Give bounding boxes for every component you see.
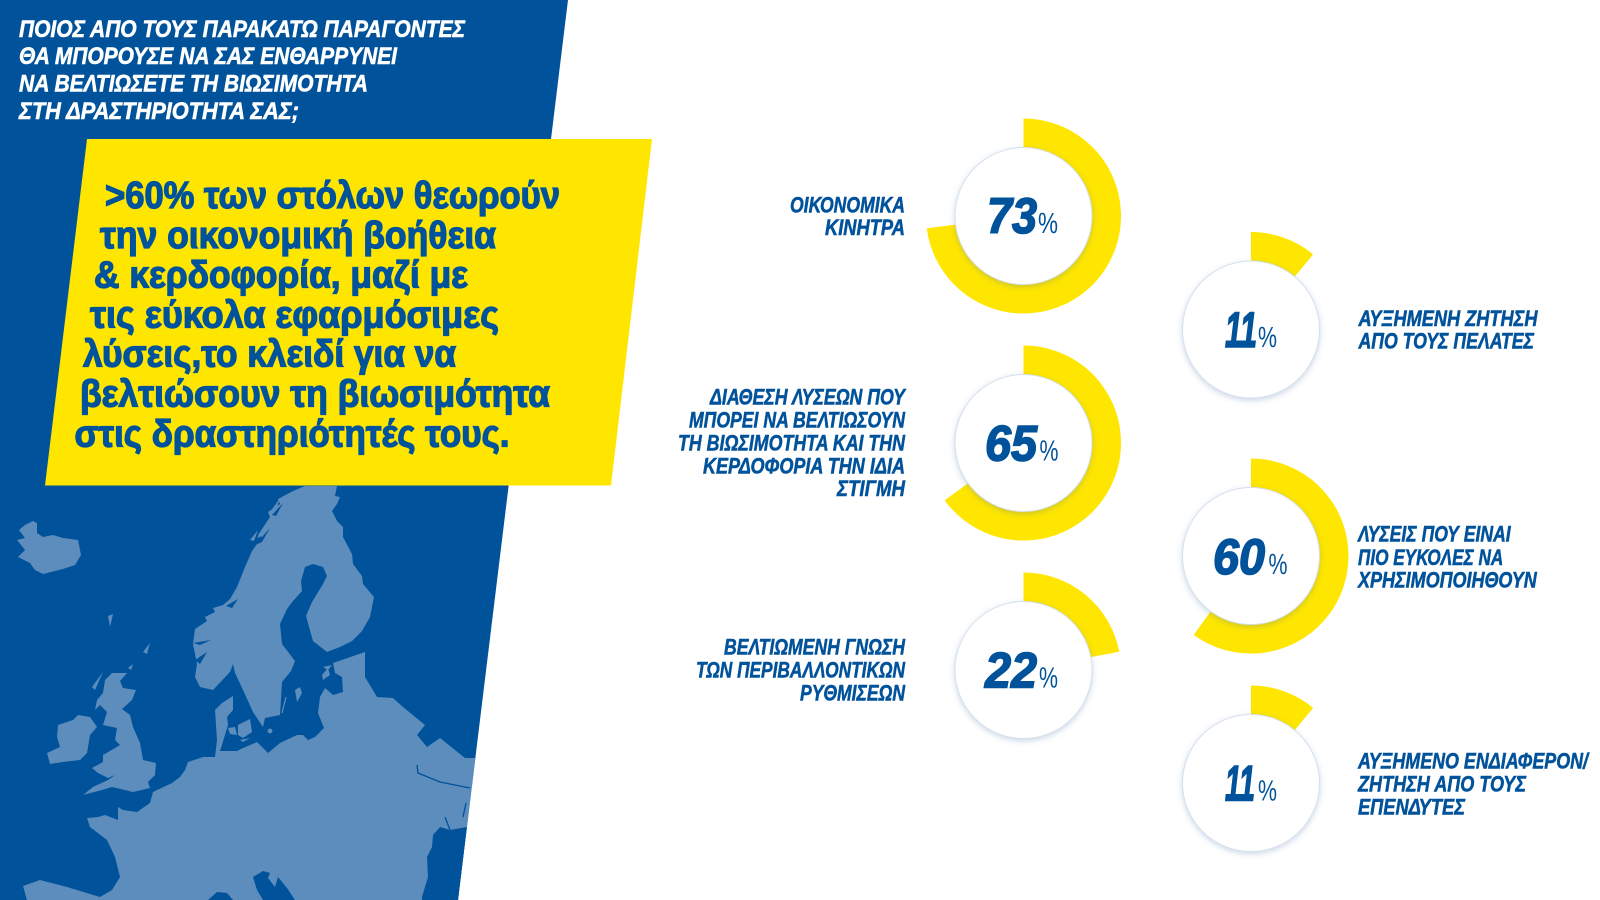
label: ΒΕΛΤΙΩΜΕΝΗ ΓΝΩΣΗ (724, 634, 906, 659)
callout text (74, 175, 560, 456)
label: ΖΗΤΗΣΗ ΑΠΟ ΤΟΥΣ (1357, 772, 1527, 796)
callout text: την οικονομική βοήθεια (100, 215, 496, 257)
value 73%: % (1038, 208, 1058, 240)
label (1357, 748, 1590, 819)
label (1356, 522, 1538, 592)
item: 11% customer demand (1182, 246, 1538, 398)
callout text: >60% των στόλων θεωρούν (105, 175, 560, 217)
callout text: λύσεις,το κλειδί για να (83, 334, 456, 376)
callout text: στις δραστηριότητές τους. (74, 414, 510, 456)
heading: ΣΤΗ ΔΡΑΣΤΗΡΙΟΤΗΤΑ ΣΑΣ; (18, 98, 299, 125)
label: ΚΙΝΗΤΡΑ (825, 215, 905, 240)
heading: ΝΑ ΒΕΛΤΙΩΣΕΤΕ ΤΗ ΒΙΩΣΙΜΟΤΗΤΑ (19, 70, 368, 98)
callout text: τις εύκολα εφαρμόσιμες (90, 294, 499, 336)
label: ΜΠΟΡΕΙ ΝΑ ΒΕΛΤΙΩΣΟΥΝ (689, 408, 906, 432)
label: ΡΥΘΜΙΣΕΩΝ (800, 680, 906, 706)
label (1358, 306, 1538, 354)
value 11%: % (1258, 776, 1277, 808)
callout text: βελτιώσουν τη βιωσιμότητα (80, 374, 550, 416)
heading: ΘΑ ΜΠΟΡΟΥΣΕ ΝΑ ΣΑΣ ΕΝΘΑΡΡΥΝΕΙ (19, 43, 398, 70)
label: ΑΠΟ ΤΟΥΣ ΠΕΛΑΤΕΣ (1358, 329, 1535, 354)
label: ΚΕΡΔΟΦΟΡΙΑ ΤΗΝ ΙΔΙΑ (703, 454, 905, 479)
label: ΛΥΣΕΙΣ ΠΟΥ ΕΙΝΑΙ (1357, 522, 1511, 547)
label (696, 634, 906, 706)
label: ΑΥΞΗΜΕΝΗ ΖΗΤΗΣΗ (1358, 306, 1538, 331)
label: ΣΤΙΓΜΗ (836, 476, 906, 501)
item: 60% easier solutions (1182, 473, 1538, 639)
item: 22% regulations knowledge (696, 587, 1105, 738)
label (678, 384, 907, 501)
value 22%: % (1039, 662, 1058, 694)
label: ΟΙΚΟΝΟΜΙΚΑ (790, 193, 905, 218)
heading: ΠΟΙΟΣ ΑΠΟ ΤΟΥΣ ΠΑΡΑΚΑΤΩ ΠΑΡΑΓΟΝΤΕΣ (19, 16, 466, 43)
label: ΔΙΑΘΕΣΗ ΛΥΣΕΩΝ ΠΟΥ (709, 384, 907, 409)
value 11%: 11 (1225, 302, 1257, 358)
value 60%: 60 (1213, 529, 1265, 585)
value 73%: 73 (987, 188, 1037, 244)
value 65%: 65 (985, 416, 1038, 472)
value 11%: % (1258, 322, 1277, 354)
label: ΠΙΟ ΕΥΚΟΛΕΣ ΝΑ (1358, 545, 1503, 570)
map of Europe (17, 486, 500, 900)
callout text: & κερδοφορία, μαζί με (94, 254, 468, 296)
label (790, 193, 905, 240)
callout: yellow panel (45, 139, 652, 486)
heading (18, 16, 466, 125)
item: 73% financial incentives (790, 133, 1106, 299)
value 65%: % (1040, 436, 1058, 468)
panel: blue background (0, 0, 568, 900)
item: 65% solutions (678, 360, 1106, 526)
label: ΧΡΗΣΙΜΟΠΟΙΗΘΟΥΝ (1356, 568, 1538, 592)
label: ΤΗ ΒΙΩΣΙΜΟΤΗΤΑ ΚΑΙ ΤΗΝ (678, 430, 906, 456)
item: 11% investor interest (1182, 700, 1590, 852)
label: ΕΠΕΝΔΥΤΕΣ (1358, 794, 1466, 819)
value 60%: % (1268, 549, 1288, 581)
label: ΤΩΝ ΠΕΡΙΒΑΛΛΟΝΤΙΚΩΝ (696, 658, 906, 682)
value 22%: 22 (984, 642, 1037, 698)
value 11%: 11 (1225, 756, 1255, 812)
